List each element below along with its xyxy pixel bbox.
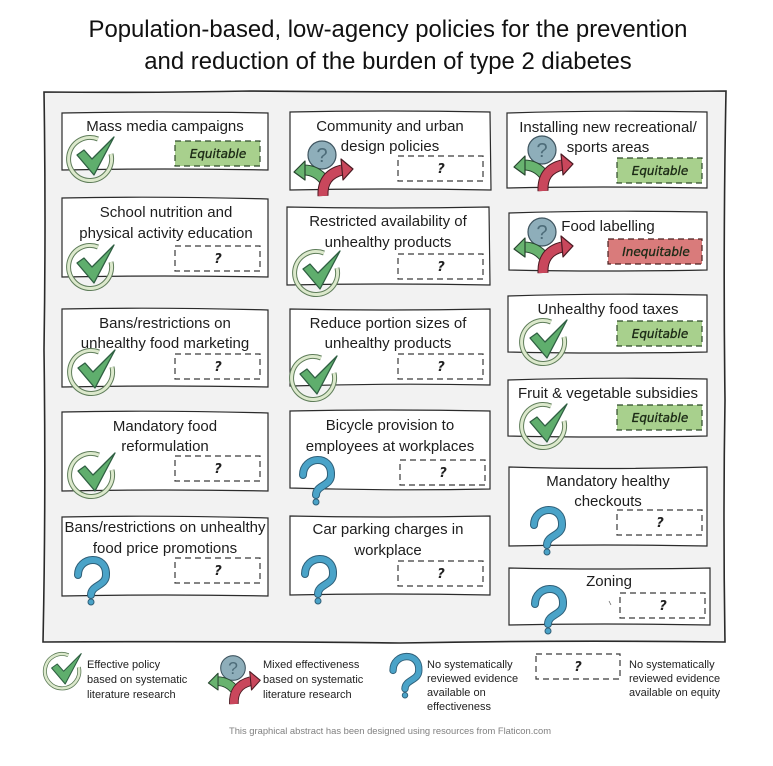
policy: Reduce portion sizes of unhealthy products: unhealthy products	[325, 335, 451, 352]
icon: no evidence question mark	[78, 560, 106, 605]
icon: mixed effectiveness	[514, 136, 573, 191]
policy: Bicycle provision to employees at workplaces: Bicycle provision to	[326, 417, 454, 434]
equity: unknown	[398, 561, 483, 586]
policy: Mandatory food reformulation: Mandatory food	[113, 418, 217, 435]
legend: no evidence on effectiveness	[393, 657, 518, 713]
equity: unknown: ?	[437, 260, 445, 275]
legend: effective policy: based on systematic	[87, 674, 188, 686]
policy: Unhealthy food taxes	[508, 294, 707, 363]
legend: no evidence on effectiveness: effectiveness	[427, 701, 492, 713]
legend: no evidence on effectiveness: No systematically	[427, 659, 513, 671]
policy: Community and urban design policies: design policies	[341, 138, 439, 155]
footer credit: This graphical abstract has been designed using resources from Flaticon.com	[229, 725, 551, 736]
equity: unknown: ?	[437, 162, 445, 177]
icon: effective check	[292, 356, 337, 399]
policy: Bans/restrictions on unhealthy food price promotions: food price promotions	[93, 540, 237, 557]
equity: unknown	[617, 510, 702, 535]
policy: Bans/restrictions on unhealthy food price promotions: Bans/restrictions on unhealthy	[65, 519, 266, 536]
equity: unknown	[175, 456, 260, 481]
icon: no evidence question mark	[305, 559, 333, 604]
legend: no evidence on equity: reviewed evidence	[629, 673, 720, 685]
legend: no evidence on effectiveness: available on	[427, 687, 486, 699]
legend: mixed effectiveness: based on systematic	[263, 674, 364, 686]
policy: Mandatory healthy checkouts: Mandatory healthy	[546, 473, 670, 490]
policy: Mandatory food reformulation	[62, 411, 268, 496]
policy: Fruit & vegetable subsidies: Fruit & vegetable subsidies	[518, 385, 698, 402]
policy: Installing new recreational/sports areas: sports areas	[567, 139, 649, 156]
equity: unknown: ?	[214, 252, 222, 267]
equity: unknown: ?	[437, 360, 445, 375]
equity: unknown: ?	[214, 564, 222, 579]
policy: Community and urban design policies: Community and urban	[316, 118, 464, 135]
legend: mixed effectiveness: literature research	[263, 689, 352, 701]
icon: effective check	[69, 245, 114, 288]
legend: no evidence on effectiveness: reviewed evidence	[427, 673, 518, 685]
title	[89, 16, 687, 75]
main panel background	[43, 91, 726, 643]
equity: equitable	[617, 158, 702, 183]
policy: Reduce portion sizes of unhealthy products: Reduce portion sizes of	[310, 315, 467, 332]
policy: Car parking charges in workplace	[290, 516, 490, 604]
policy: Community and urban design policies	[290, 111, 491, 196]
policy: Mass media campaigns	[62, 112, 268, 180]
legend: effective policy	[45, 654, 188, 701]
policy: Car parking charges in workplace: Car parking charges in	[313, 521, 463, 538]
equity: unknown	[175, 246, 260, 271]
equity: unknown: ?	[214, 360, 222, 375]
equity: unknown: ?	[659, 599, 667, 614]
policy: Restricted availability of unhealthy products	[287, 207, 490, 294]
equity: unknown: ?	[437, 567, 445, 582]
equity: unknown	[398, 156, 483, 181]
title: Population-based, low-agency policies for the prevention	[89, 16, 687, 43]
policy: School nutrition and physical activity education: physical activity education	[79, 225, 253, 242]
icon: effective check	[69, 137, 114, 180]
icon: mixed effectiveness	[294, 141, 353, 196]
policy: Reduce portion sizes of unhealthy products	[290, 309, 490, 399]
legend: mixed effectiveness	[208, 656, 364, 704]
policy: Installing new recreational/sports areas	[507, 111, 707, 191]
equity: equitable: Equitable	[190, 147, 246, 161]
legend: no evidence on equity: ?	[574, 660, 582, 675]
policy: Zoning	[509, 568, 710, 634]
legend: mixed effectiveness: Mixed effectiveness	[263, 659, 360, 671]
icon: no evidence question mark	[535, 589, 563, 634]
policy: Zoning: Zoning	[586, 573, 632, 590]
icon: no evidence question mark	[534, 510, 562, 555]
equity: unknown: ?	[214, 462, 222, 477]
policy: Mandatory healthy checkouts: checkouts	[574, 493, 642, 510]
legend: no evidence on equity: No systematically	[629, 659, 715, 671]
equity: unknown	[400, 460, 485, 485]
equity: inequitable: Inequitable	[622, 245, 690, 259]
equity: equitable	[617, 405, 702, 430]
policy: School nutrition and physical activity education	[62, 197, 268, 288]
policy: School nutrition and physical activity education: School nutrition and	[100, 204, 232, 221]
legend: no evidence on equity	[536, 654, 721, 699]
equity: unknown: ?	[656, 516, 664, 531]
policy: Fruit & vegetable subsidies	[508, 378, 707, 447]
policy: Mass media campaigns: Mass media campaigns	[86, 118, 244, 135]
policy: Mandatory healthy checkouts	[509, 467, 707, 555]
equity: unknown	[398, 354, 483, 379]
policy: Restricted availability of unhealthy products: Restricted availability of	[309, 213, 468, 230]
equity: equitable: Equitable	[632, 164, 688, 178]
policy: Mandatory food reformulation: reformulation	[121, 438, 209, 455]
policy: Bicycle provision to employees at workplaces: employees at workplaces	[306, 438, 474, 455]
icon: effective check	[70, 453, 115, 496]
title: and reduction of the burden of type 2 diabetes	[144, 48, 632, 75]
equity: unknown	[175, 558, 260, 583]
icon: effective check	[522, 404, 567, 447]
policy: Food labelling: Food labelling	[561, 218, 655, 235]
policy: Bans/restrictions on unhealthy food price promotions	[62, 516, 268, 605]
policy: Food labelling	[509, 211, 707, 273]
policy: Bans/restrictions on unhealthy food marketing: Bans/restrictions on	[99, 315, 231, 332]
policy: Restricted availability of unhealthy products: unhealthy products	[325, 234, 451, 251]
legend: effective policy: Effective policy	[87, 659, 161, 671]
equity: inequitable	[608, 239, 702, 264]
equity: unknown	[175, 354, 260, 379]
policy: Car parking charges in workplace: workplace	[353, 542, 422, 559]
equity: unknown	[398, 254, 483, 279]
equity: unknown	[620, 593, 705, 618]
policy: Unhealthy food taxes: Unhealthy food taxes	[538, 301, 678, 318]
policy: Bans/restrictions on unhealthy food marketing	[62, 308, 268, 393]
policy: Bicycle provision to employees at workplaces	[290, 410, 490, 505]
policy: Installing new recreational/sports areas: Installing new recreational/	[519, 119, 698, 136]
icon: mixed effectiveness	[514, 218, 573, 273]
equity: equitable: Equitable	[632, 411, 688, 425]
icon: effective check	[70, 350, 115, 393]
legend: no evidence on equity: available on equity	[629, 687, 721, 699]
policy: Bans/restrictions on unhealthy food marketing: unhealthy food marketing	[81, 335, 249, 352]
legend: effective policy: literature research	[87, 689, 176, 701]
equity: equitable	[175, 141, 260, 166]
equity: equitable	[617, 321, 702, 346]
icon: no evidence question mark	[303, 460, 331, 505]
icon: effective check	[522, 320, 567, 363]
equity: equitable: Equitable	[632, 327, 688, 341]
icon: effective check	[295, 251, 340, 294]
equity: unknown: ?	[439, 466, 447, 481]
